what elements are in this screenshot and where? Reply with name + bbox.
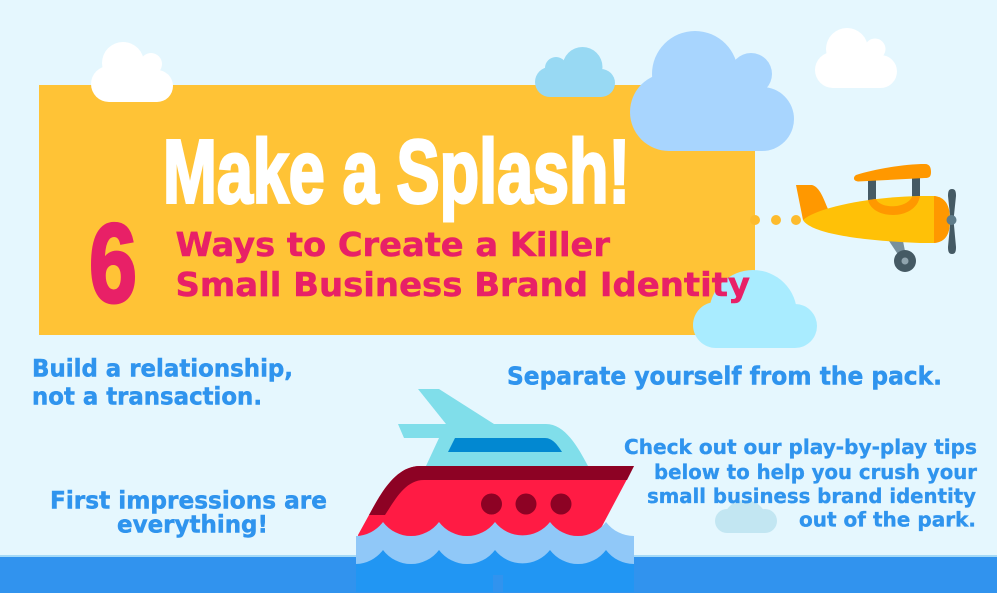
subtitle — [176, 225, 750, 304]
text: play-by-play tips — [624, 435, 977, 532]
icon: boat — [356, 389, 634, 592]
hull stripe — [369, 466, 634, 515]
small mark on water — [493, 575, 503, 592]
sea band — [0, 555, 997, 593]
landing gear — [889, 241, 916, 272]
subtitle: Ways to Create a Killer — [176, 225, 611, 264]
text: build a relationship — [32, 354, 293, 410]
title banner — [39, 85, 755, 335]
text: separate yourself: Separate yourself from the pack. — [507, 362, 942, 390]
big number 6: 6 — [89, 201, 137, 326]
text: build a relationship: Build a relationship, — [32, 354, 293, 382]
cabin — [398, 424, 588, 466]
portholes — [481, 494, 572, 514]
window — [448, 438, 562, 452]
icon: white cloud left — [91, 42, 173, 102]
icon: pale cloud behind text — [715, 500, 777, 533]
text: build a relationship: not a transaction. — [32, 382, 262, 410]
icon: large blue cloud — [630, 31, 794, 151]
heading: Make a Splash: Make a Splash! — [163, 122, 630, 222]
text: first impressions: everything! — [117, 510, 268, 538]
fuselage — [803, 196, 950, 243]
subtitle: Small Business Brand Identity — [176, 265, 750, 304]
text: play-by-play tips: small business brand identity — [647, 484, 976, 508]
icon: blue cloud top centre — [535, 47, 615, 97]
text: first impressions — [50, 486, 327, 538]
struts — [868, 176, 920, 202]
text: play-by-play tips: below to help you crush your — [654, 460, 977, 484]
propeller — [946, 189, 956, 254]
waves front — [356, 550, 634, 592]
icon: airplane — [750, 164, 956, 272]
nose band and cockpit — [868, 196, 950, 243]
hull — [358, 466, 634, 540]
text: first impressions: First impressions are — [50, 486, 327, 514]
icon: white cloud right — [815, 28, 897, 88]
icon: light blue cloud lower right — [693, 270, 817, 348]
waves back — [356, 522, 634, 565]
upper fin — [418, 389, 494, 424]
dotted trail — [750, 215, 801, 225]
text: play-by-play tips: out of the park. — [799, 508, 976, 532]
text: play-by-play tips: Check out our play-by-play tips — [624, 435, 977, 459]
tail — [796, 185, 828, 220]
top wing — [854, 164, 931, 182]
